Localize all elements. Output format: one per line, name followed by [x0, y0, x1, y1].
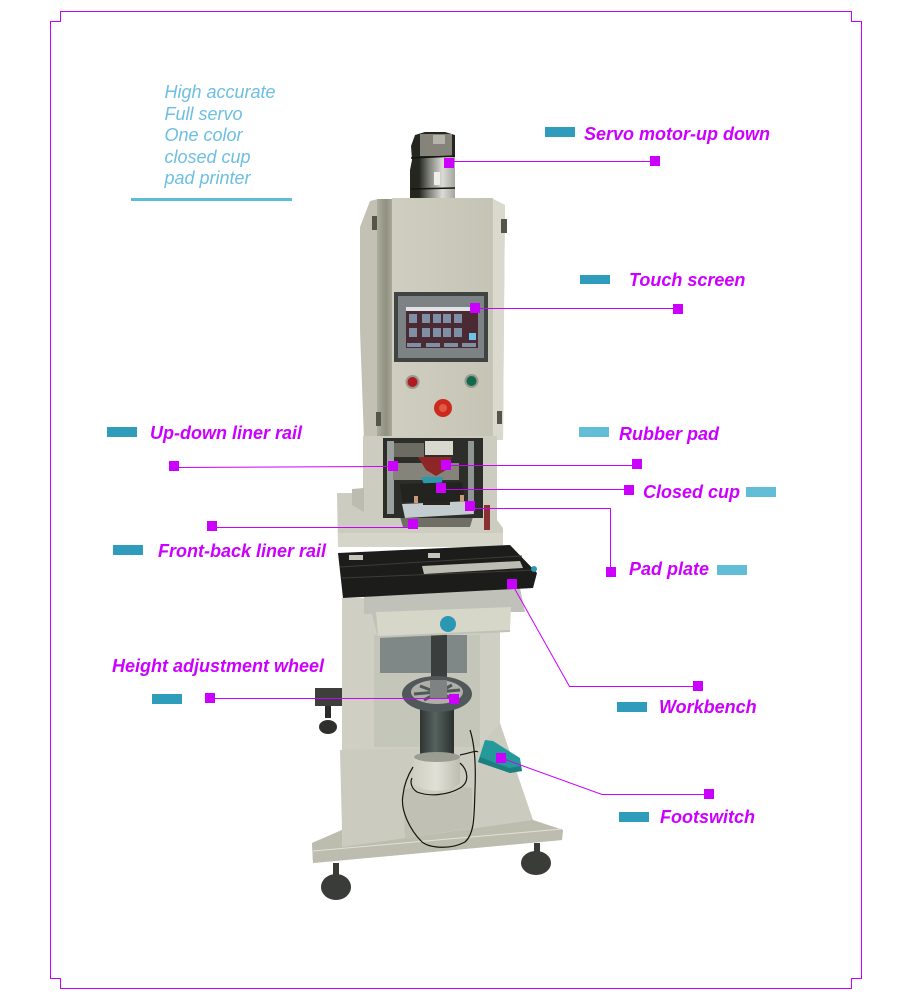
intro underline: [131, 198, 292, 201]
control cabinet: [360, 198, 507, 440]
levelling feet: [321, 843, 551, 900]
front-back slide frame: [337, 436, 503, 547]
machine photo illustration: [312, 132, 563, 900]
intro text: Full servo: [164, 104, 243, 124]
label: workbench: Workbench: [659, 697, 757, 717]
label: pad plate: [465, 501, 747, 579]
label: closed cup: Closed cup: [643, 482, 740, 502]
servo motor: [410, 132, 455, 198]
label: pad plate: Pad plate: [629, 559, 709, 579]
label: front-back liner rail: Front-back liner rail: [158, 541, 327, 561]
intro text: High accurate: [164, 82, 276, 102]
label: height adjustment wheel: [112, 656, 459, 704]
label: closed cup: [436, 482, 776, 502]
label: touch screen: [470, 270, 745, 314]
intro text: One color: [164, 125, 244, 145]
label: footswitch: [496, 753, 755, 827]
label: footswitch: Footswitch: [660, 807, 755, 827]
height adjustment column and wheel: [402, 676, 472, 838]
label: height adjustment wheel: Height adjustment wheel: [112, 656, 325, 676]
label: rubber pad: [441, 424, 720, 470]
machine column: [342, 598, 500, 750]
label: rubber pad: Rubber pad: [619, 424, 720, 444]
buttons: [406, 374, 478, 417]
label: up-down liner rail: [107, 423, 398, 471]
intro text: [164, 82, 276, 188]
label: servo motor: [444, 124, 770, 168]
label: servo motor: Servo motor-up down: [584, 124, 770, 144]
label: up-down liner rail: Up-down liner rail: [150, 423, 303, 443]
side bracket: [315, 688, 342, 734]
workbench plate: [338, 545, 537, 638]
label: front-back liner rail: [113, 519, 418, 561]
label: workbench: [507, 579, 757, 717]
printing head: [383, 438, 483, 518]
base plate: [312, 723, 563, 863]
intro text: closed cup: [164, 147, 251, 167]
foot switch: [478, 740, 522, 773]
touch screen: [394, 292, 488, 362]
intro text: pad printer: [164, 168, 252, 188]
label: touch screen: Touch screen: [629, 270, 745, 290]
cables: [402, 730, 478, 847]
